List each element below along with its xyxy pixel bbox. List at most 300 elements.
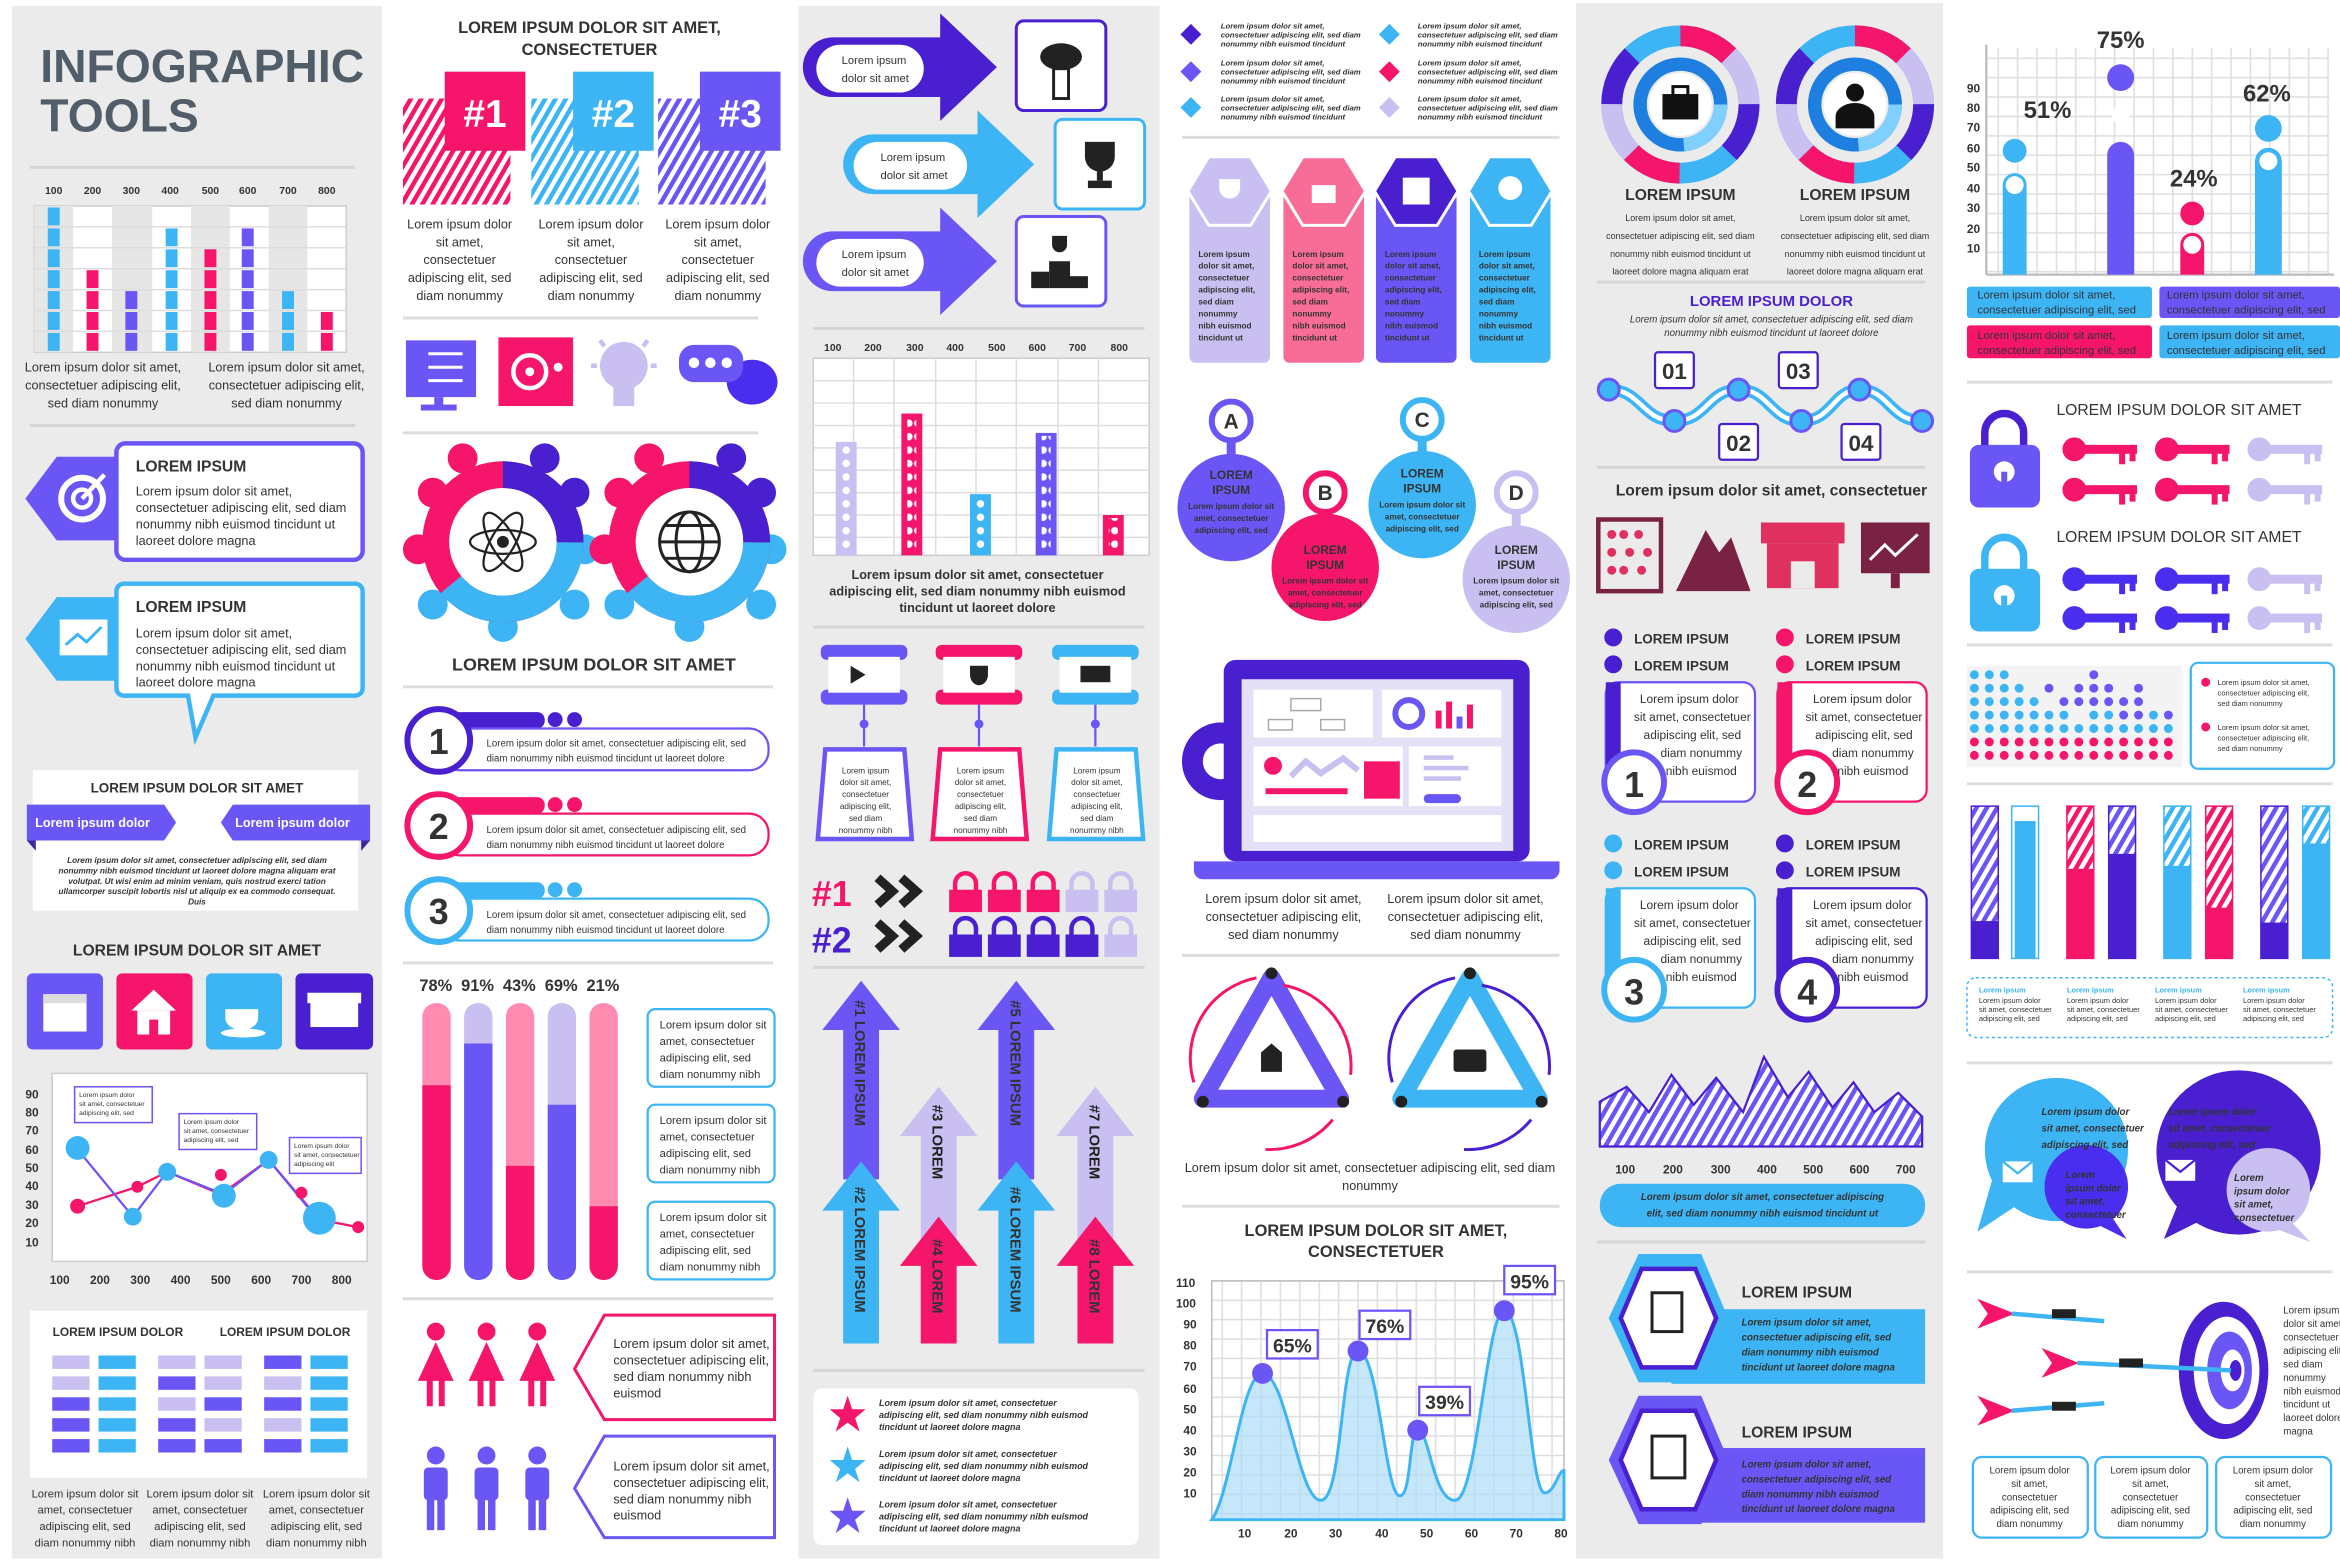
ranking blocks #1 #2 #3: consectetuer <box>555 253 628 267</box>
hex item: document: LOREM IPSUM <box>1742 1284 1852 1301</box>
balloons A B C D: LOREM <box>1210 468 1253 482</box>
dotted legend box: sit amet, consectetuer <box>2243 1005 2316 1014</box>
bar chart: squares: 500 <box>202 186 219 197</box>
callout: target: nonummy nibh euismod tincidunt ut <box>136 517 336 531</box>
area chart: 110 <box>1176 1276 1196 1290</box>
bar chart: people heads: 60 <box>1967 141 1981 155</box>
text block: table captions: diam nonummy nibh <box>35 1538 135 1550</box>
line chart: 20 <box>25 1216 39 1230</box>
dotted legend box: Lorem ipsum dolor <box>1979 996 2041 1005</box>
up arrows: #1 LOREM IPSUM <box>851 1000 868 1126</box>
legend box: dot matrix: Lorem ipsum dolor sit amet, <box>2218 723 2310 732</box>
area chart: 10 <box>1183 1486 1197 1500</box>
legend: diamonds: Lorem ipsum dolor sit amet, <box>1221 95 1325 104</box>
line chart: 700 <box>291 1273 312 1287</box>
callout: women: euismod <box>613 1386 661 1400</box>
area chart: 70 <box>1510 1527 1523 1541</box>
callout: men: sed diam nonummy nibh <box>613 1492 751 1506</box>
icons: men <box>424 1447 549 1530</box>
capsule bar chart: 69% <box>545 977 578 995</box>
text block: laptop captions: consectetuer adipiscing elit, <box>1388 910 1543 924</box>
numbered items 1 and 2: Lorem ipsum dolor <box>1813 692 1912 706</box>
icons row: checklist, safe, bulb, chat <box>406 337 778 411</box>
numbered items 3 and 4: diam nonummy <box>1832 952 1914 966</box>
line chart: 80 <box>25 1106 39 1120</box>
dot matrix chart <box>1967 666 2182 767</box>
bar chart: squares: 300 <box>123 186 140 197</box>
numbered items 3 and 4: nibh euismod <box>1666 970 1737 984</box>
hanging tags: Lorem ipsum <box>957 766 1004 775</box>
area chart: 30 <box>1329 1527 1343 1541</box>
legend: diamonds: consectetuer adipiscing elit, sed diam <box>1418 68 1558 77</box>
numbered item 1: Lorem ipsum dolor sit amet, consectetuer adipiscing elit, sed <box>487 738 746 749</box>
hanging tags: adipiscing elit, <box>955 802 1006 811</box>
hexagon tags: nibh euismod <box>1292 321 1346 330</box>
text boxes: darts: diam nonummy <box>2240 1519 2306 1530</box>
numbered item 1 <box>407 709 769 772</box>
wave timeline: 02 <box>1726 431 1751 456</box>
hexagon tags: tincidunt ut <box>1479 333 1524 342</box>
text block: laptop captions <box>1205 892 1544 942</box>
hanging tags: nonummy nibh <box>839 826 893 835</box>
banner panel: volutpat. Ut wisi enim ad minim veniam, quis nostrud exerci tation <box>68 877 326 886</box>
numbered items 3 and 4: LOREM IPSUM <box>1634 837 1729 852</box>
text boxes: darts: consectetuer <box>2123 1492 2179 1503</box>
hexagon tags: tincidunt ut <box>1292 333 1337 342</box>
locks and keys: LOREM IPSUM DOLOR SIT AMET <box>2056 529 2302 546</box>
capsule bar chart: 21% <box>586 977 620 995</box>
hexagon tags: consectetuer <box>1385 274 1437 283</box>
bar chart: people heads: 80 <box>1967 101 1981 115</box>
numbered items 1 and 2: LOREM IPSUM <box>1806 658 1900 673</box>
arrow 1 with cloud icon: Lorem ipsum <box>842 55 906 67</box>
area chart: 40 <box>1183 1424 1197 1438</box>
text block: donut captions <box>1606 187 1929 277</box>
text block: table captions: amet, consectetuer <box>152 1505 248 1517</box>
bar chart: squares: 100 <box>45 186 63 197</box>
ranking blocks #1 #2 #3: diam nonummy <box>548 289 635 303</box>
heading: wave timeline: LOREM IPSUM DOLOR <box>1690 293 1853 310</box>
darts and target: consectetuer <box>2283 1333 2340 1344</box>
legend: diamonds: nonummy nibh euismod tincidunt <box>1418 77 1543 86</box>
legend: stars: tincidunt ut laoreet dolore magna <box>879 1422 1021 1432</box>
balloons A B C D: Lorem ipsum dolor sit <box>1379 501 1465 510</box>
ranking blocks #1 #2 #3: Lorem ipsum dolor <box>539 217 644 231</box>
hex item: document: Lorem ipsum dolor sit amet, <box>1742 1318 1871 1329</box>
text block: table captions <box>32 1488 371 1550</box>
hex item: document: tincidunt ut laoreet dolore magna <box>1742 1362 1896 1373</box>
numbered items 1 and 2: sit amet, consectetuer <box>1634 710 1751 724</box>
legend: diamonds: consectetuer adipiscing elit, sed diam <box>1221 30 1361 39</box>
title: INFOGRAPHIC <box>40 40 364 92</box>
text boxes: capsule chart: diam nonummy nibh <box>660 1164 760 1176</box>
numbered items 1 and 2: Lorem ipsum dolor <box>1640 692 1739 706</box>
text block: laptop captions: consectetuer adipiscing elit, <box>1206 910 1361 924</box>
speech bubbles: ipsum dolor <box>2065 1183 2122 1194</box>
legend: stars: Lorem ipsum dolor sit amet, consectetuer <box>879 1500 1057 1510</box>
callout: target: LOREM IPSUM <box>136 459 246 476</box>
speech bubbles: sit amet, <box>2234 1200 2273 1211</box>
hanging tags: sed diam <box>964 814 997 823</box>
gear: globe <box>589 443 786 642</box>
text boxes: capsule chart: adipiscing elit, sed <box>660 1245 751 1257</box>
balloons A B C D: LOREM <box>1304 543 1347 557</box>
dotted legend box: Lorem ipsum <box>2155 986 2202 995</box>
balloons A B C D: IPSUM <box>1306 558 1344 572</box>
ranking blocks #1 #2 #3: consectetuer <box>682 253 755 267</box>
legend: stars: adipiscing elit, sed diam nonummy nibh euismod <box>879 1512 1089 1522</box>
dotted legend box <box>1967 978 2333 1038</box>
darts and target: Lorem ipsum <box>2283 1306 2339 1317</box>
dotted legend box: Lorem ipsum dolor <box>2243 996 2305 1005</box>
text boxes: darts: adipiscing elit, sed <box>2111 1506 2190 1517</box>
legend: stars <box>813 1388 1139 1545</box>
hanging tags: Lorem ipsum <box>1073 766 1121 775</box>
legend: diamonds: Lorem ipsum dolor sit amet, <box>1221 59 1325 68</box>
legend: diamonds <box>1180 21 1558 121</box>
banner panel: Lorem ipsum dolor <box>235 816 350 830</box>
area chart: 80 <box>1183 1339 1197 1353</box>
up arrows: #5 LOREM IPSUM <box>1006 1000 1023 1126</box>
gear: atom <box>403 443 600 642</box>
line chart: adipiscing elit, sed <box>79 1110 134 1117</box>
colored text boxes: consectetuer adipiscing elit, sed <box>1977 345 2136 357</box>
hanging tags: consectetuer <box>957 790 1004 799</box>
dotted legend box: sit amet, consectetuer <box>2067 1005 2140 1014</box>
text block: bar chart caption: tincidunt ut laoreet dolore <box>899 601 1056 615</box>
numbered items 1 and 2: LOREM IPSUM <box>1634 631 1729 646</box>
line chart: 50 <box>25 1161 39 1175</box>
text block: chart captions: sed diam nonummy <box>231 397 342 411</box>
banner panel <box>27 770 370 911</box>
ranking blocks #1 #2 #3: consectetuer <box>423 253 497 267</box>
cycle triangles <box>1190 967 1550 1150</box>
colored text boxes: Lorem ipsum dolor sit amet, <box>1977 330 2115 342</box>
text boxes: capsule chart: amet, consectetuer <box>660 1036 755 1048</box>
speech bubbles: Lorem ipsum dolor <box>2042 1107 2130 1118</box>
hexagon tags: nonummy <box>1479 309 1518 318</box>
callout: men <box>575 1436 775 1538</box>
balloons A B C D: adipiscing elit, sed <box>1386 524 1459 533</box>
hexagon tags: Lorem ipsum <box>1198 250 1250 259</box>
text block: laptop captions: sed diam nonummy <box>1228 928 1339 942</box>
text block: laptop captions: Lorem ipsum dolor sit amet, <box>1387 892 1544 906</box>
hex item: document: consectetuer adipiscing elit, sed <box>1742 1333 1892 1344</box>
darts and target: sed diam <box>2283 1359 2323 1370</box>
hexagon tags: sed diam <box>1479 298 1514 307</box>
banner panel: Lorem ipsum dolor <box>35 816 150 830</box>
callout: target: laoreet dolore magna <box>136 534 256 548</box>
bar chart: dotted columns: 500 <box>988 343 1006 354</box>
locks and keys: LOREM IPSUM DOLOR SIT AMET <box>2056 402 2302 419</box>
text block: donut captions: Lorem ipsum dolor sit amet, <box>1800 213 1910 223</box>
ranking locks: #1 <box>812 874 852 914</box>
line chart: sit amet, consectetuer <box>184 1128 250 1135</box>
numbered items 3 and 4: LOREM IPSUM <box>1634 864 1729 879</box>
legend: stars: adipiscing elit, sed diam nonummy nibh euismod <box>879 1461 1089 1471</box>
text block: table captions: adipiscing elit, sed <box>39 1521 131 1533</box>
numbered items 3 and 4: Lorem ipsum dolor <box>1640 898 1739 912</box>
legend: diamonds: Lorem ipsum dolor sit amet, <box>1221 21 1325 30</box>
numbered items 1 and 2: diam nonummy <box>1832 746 1914 760</box>
heading: icons: LOREM IPSUM DOLOR SIT AMET <box>73 942 321 959</box>
up arrows: #4 LOREM <box>929 1239 946 1314</box>
area chart: 90 <box>1183 1318 1197 1332</box>
heading: wave timeline: Lorem ipsum dolor sit amet, consectetuer adipiscing elit, sed diam <box>1630 314 1913 325</box>
bar chart: squares: 800 <box>318 186 336 197</box>
title <box>40 40 364 141</box>
area chart: 20 <box>1284 1527 1298 1541</box>
line chart: 90 <box>25 1088 39 1102</box>
ranking blocks #1 #2 #3: #2 <box>592 93 635 136</box>
hexagon tags: nonummy <box>1385 309 1424 318</box>
legend box: dot matrix: Lorem ipsum dolor sit amet, <box>2218 678 2310 687</box>
bar chart: squares: 200 <box>84 186 101 197</box>
text block: donut captions: laoreet dolore magna aliquam erat <box>1612 267 1749 277</box>
numbered item 2 <box>407 794 769 857</box>
balloons A B C D: LOREM <box>1401 467 1444 481</box>
legend: stars: tincidunt ut laoreet dolore magna <box>879 1524 1021 1534</box>
balloons A B C D: amet, consectetuer <box>1479 589 1554 598</box>
up arrows: #6 LOREM IPSUM <box>1006 1187 1023 1313</box>
bar chart: dotted columns: 400 <box>946 343 964 354</box>
ranking blocks #1 #2 #3: #1 <box>463 93 507 136</box>
bar chart: dotted columns <box>813 343 1149 555</box>
text block: chart captions: consectetuer adipiscing elit, <box>25 379 181 393</box>
hex item: book: consectetuer adipiscing elit, sed <box>1742 1474 1892 1485</box>
numbered items 1 and 2: nibh euismod <box>1666 764 1737 778</box>
numbered items 1 and 2: sit amet, consectetuer <box>1806 710 1922 724</box>
bar chart: people heads: 75% <box>2097 27 2145 54</box>
dotted legend box: adipiscing elit, sed <box>1979 1014 2040 1023</box>
text boxes: capsule chart: Lorem ipsum dolor sit <box>660 1115 767 1127</box>
text block: table captions: adipiscing elit, sed <box>154 1521 246 1533</box>
callout: monitor: consectetuer adipiscing elit, sed diam <box>136 643 346 657</box>
ranking blocks #1 #2 #3: sit amet, <box>694 235 742 249</box>
hex item: book: LOREM IPSUM <box>1742 1425 1852 1442</box>
capsule bar chart: 78% <box>419 977 453 995</box>
area chart: 39% <box>1425 1392 1464 1414</box>
mountain chart: Lorem ipsum dolor sit amet, consectetuer adipiscing <box>1641 1192 1884 1203</box>
legend: stars: adipiscing elit, sed diam nonummy nibh euismod <box>879 1410 1089 1420</box>
ranking blocks #1 #2 #3: sit amet, <box>436 235 484 249</box>
dotted legend box: Lorem ipsum dolor <box>2155 996 2217 1005</box>
numbered item 1: 1 <box>429 722 449 762</box>
bar chart: people heads: 90 <box>1967 82 1981 96</box>
banner panel: LOREM IPSUM DOLOR SIT AMET <box>91 781 304 796</box>
ranking blocks #1 #2 #3: adipiscing elit, sed <box>539 271 643 285</box>
text boxes: darts: Lorem ipsum dolor <box>1989 1465 2070 1476</box>
numbered items 3 and 4: LOREM IPSUM <box>1806 864 1900 879</box>
callout: monitor: laoreet dolore magna <box>136 676 256 690</box>
numbered items 1 and 2: 1 <box>1624 765 1644 805</box>
heading: numbered list: LOREM IPSUM DOLOR SIT AMET <box>452 654 736 674</box>
hexagon tags: adipiscing elit, <box>1385 286 1442 295</box>
bar chart: squares <box>34 186 346 352</box>
heading: column 2: CONSECTETUER <box>522 41 658 59</box>
mountain chart: 200 <box>1663 1162 1683 1176</box>
text block: table captions: Lorem ipsum dolor sit <box>147 1488 254 1500</box>
hexagon tags: tincidunt ut <box>1198 333 1243 342</box>
hex item: document: diam nonummy nibh euismod <box>1742 1347 1880 1358</box>
hex item: book: Lorem ipsum dolor sit amet, <box>1742 1459 1871 1470</box>
hex item: book: diam nonummy nibh euismod <box>1742 1489 1880 1500</box>
text block: chart captions: Lorem ipsum dolor sit amet, <box>208 361 365 375</box>
hexagon tags: adipiscing elit, <box>1198 286 1255 295</box>
line chart: 60 <box>25 1143 39 1157</box>
legend box: dot matrix <box>2191 663 2334 769</box>
up arrows: #7 LOREM <box>1085 1105 1102 1179</box>
numbered items 3 and 4: LOREM IPSUM <box>1806 837 1900 852</box>
ranking locks: #2 <box>812 920 852 960</box>
text block: bar chart caption: Lorem ipsum dolor sit amet, consectetuer <box>851 568 1104 582</box>
donut: briefcase <box>1612 36 1749 173</box>
numbered items 1 and 2: adipiscing elit, sed <box>1815 728 1913 742</box>
laptop with gear <box>1182 660 1560 879</box>
hexagon tags: dolor sit amet, <box>1479 262 1535 271</box>
hexagon tags: nonummy <box>1198 309 1238 318</box>
darts and target: magna <box>2283 1427 2314 1438</box>
area chart: 20 <box>1183 1465 1197 1479</box>
text boxes: capsule chart: amet, consectetuer <box>660 1132 755 1144</box>
area chart: 10 <box>1238 1527 1252 1541</box>
text boxes: darts: consectetuer <box>2002 1492 2058 1503</box>
balloons A B C D: adipiscing elit, sed <box>1195 526 1268 535</box>
balloons A B C D: adipiscing elit, sed <box>1480 601 1553 610</box>
hex item: book <box>1609 1396 1925 1524</box>
text boxes: darts: diam nonummy <box>1996 1519 2063 1530</box>
text boxes: darts: adipiscing elit, sed <box>1990 1506 2069 1517</box>
colored text boxes: Lorem ipsum dolor sit amet, <box>1977 290 2115 302</box>
ranking blocks #1 #2 #3: #3 <box>719 93 762 136</box>
dotted legend box: adipiscing elit, sed <box>2243 1014 2304 1023</box>
balloons A B C D: adipiscing elit, sed <box>1289 601 1362 610</box>
text block: table captions: diam nonummy nibh <box>150 1538 250 1550</box>
text block: chart captions <box>25 361 365 411</box>
wave timeline <box>1598 352 1933 460</box>
hexagon tags: dolor sit amet, <box>1198 262 1254 271</box>
panel: column 5 background <box>1576 3 1943 1559</box>
speech bubbles: consectetuer <box>2065 1210 2127 1221</box>
area chart: 70 <box>1183 1359 1197 1373</box>
text block: table captions: Lorem ipsum dolor sit <box>32 1488 139 1500</box>
hexagon tags: adipiscing elit, <box>1479 286 1536 295</box>
capsule bar chart: 91% <box>461 977 494 995</box>
line chart: Lorem ipsum dolor <box>79 1092 135 1099</box>
numbered items 3 and 4: sit amet, consectetuer <box>1634 916 1751 930</box>
text block: table captions: diam nonummy nibh <box>266 1538 367 1550</box>
numbered items 3 and 4: 4 <box>1797 973 1817 1013</box>
hexagon tags: consectetuer <box>1479 274 1531 283</box>
ranking blocks #1 #2 #3: sit amet, <box>567 235 615 249</box>
balloons A B C D: amet, consectetuer <box>1288 589 1363 598</box>
arrow 2 with trophy icon: Lorem ipsum <box>880 152 945 164</box>
text boxes: capsule chart: adipiscing elit, sed <box>660 1148 751 1160</box>
text block: donut captions: LOREM IPSUM <box>1625 187 1736 204</box>
area chart: 30 <box>1183 1445 1197 1459</box>
text boxes: darts: sit amet, <box>2132 1479 2169 1490</box>
numbered items 3 and 4: 3 <box>1624 973 1644 1013</box>
line chart: 70 <box>25 1124 39 1138</box>
dotted legend box: sit amet, consectetuer <box>2155 1005 2228 1014</box>
bar chart: people heads: 30 <box>1967 201 1981 215</box>
balloons A B C D: IPSUM <box>1212 483 1250 497</box>
panel: column 1 background <box>12 6 382 1559</box>
legend: diamonds: Lorem ipsum dolor sit amet, <box>1418 21 1521 30</box>
ranking blocks #1 #2 #3: adipiscing elit, sed <box>666 271 770 285</box>
text boxes: capsule chart: Lorem ipsum dolor sit <box>660 1212 767 1224</box>
text block: donut captions: laoreet dolore magna aliquam erat <box>1787 267 1924 277</box>
numbered items 3 and 4: nibh euismod <box>1837 970 1908 984</box>
text block: table captions: amet, consectetuer <box>37 1505 133 1517</box>
text boxes: darts: diam nonummy <box>2117 1519 2184 1530</box>
table panel: LOREM IPSUM DOLOR <box>220 1325 351 1339</box>
text boxes: darts: Lorem ipsum dolor <box>2110 1465 2191 1476</box>
numbered items 1 and 2: 2 <box>1797 765 1817 805</box>
line chart: adipiscing elit <box>294 1161 334 1168</box>
legend box: dot matrix: consectetuer adipiscing elit, <box>2218 689 2309 698</box>
heading: column 2: LOREM IPSUM DOLOR SIT AMET, <box>458 19 721 37</box>
speech bubbles: adipiscing elit, sed <box>2042 1140 2129 1151</box>
heading: wave timeline <box>1630 293 1913 339</box>
legend: diamonds: consectetuer adipiscing elit, sed diam <box>1418 30 1558 39</box>
text boxes: capsule chart: diam nonummy nibh <box>660 1069 760 1081</box>
numbered items 3 and 4: adipiscing elit, sed <box>1644 934 1741 948</box>
bar chart: people heads: 51% <box>2024 97 2071 124</box>
area chart: 60 <box>1465 1527 1478 1541</box>
callout: men: consectetuer adipiscing elit, <box>613 1476 769 1490</box>
balloons A B C D: amet, consectetuer <box>1194 514 1269 523</box>
icons row: squares <box>27 973 373 1049</box>
numbered items 3 and 4 <box>1604 834 1927 1020</box>
hanging tags: consectetuer <box>1073 790 1121 799</box>
hexagon tags: sed diam <box>1292 298 1328 307</box>
hexagon tags: Lorem ipsum <box>1292 250 1344 259</box>
text boxes: darts: sit amet, <box>2255 1479 2291 1490</box>
icons row: abacus, mountain, shop, chart <box>1598 520 1930 591</box>
hanging tags: sed diam <box>849 814 882 823</box>
darts and target: nibh euismod <box>2283 1386 2340 1397</box>
numbered items 3 and 4: adipiscing elit, sed <box>1815 934 1913 948</box>
dotted legend box: Lorem ipsum <box>2067 986 2114 995</box>
capsule bar chart: 43% <box>503 977 536 995</box>
numbered item 3: diam nonummy nibh euismod tincidunt ut laoreet dolore <box>487 925 724 936</box>
bar chart: dotted columns: 300 <box>906 343 924 354</box>
area chart: 50 <box>1420 1527 1434 1541</box>
numbered items 3 and 4: Lorem ipsum dolor <box>1813 898 1912 912</box>
bar chart: dotted columns: 600 <box>1028 343 1046 354</box>
bar chart: squares: 400 <box>161 186 179 197</box>
callout: women: Lorem ipsum dolor sit amet, <box>613 1337 770 1351</box>
colored text boxes: consectetuer adipiscing elit, sed <box>2167 304 2325 316</box>
ranking blocks #1 #2 #3: diam nonummy <box>416 289 504 303</box>
legend: diamonds: consectetuer adipiscing elit, sed diam <box>1418 103 1558 112</box>
area chart: 65% <box>1273 1335 1312 1357</box>
wave timeline: 04 <box>1849 431 1874 456</box>
ranking blocks #1 #2 #3: diam nonummy <box>675 289 762 303</box>
arrow 2 with trophy icon: dolor sit amet <box>880 170 949 182</box>
bar chart: dotted columns: 100 <box>824 343 842 354</box>
text block: bar chart caption <box>829 568 1126 615</box>
numbered items 1 and 2 <box>1604 628 1927 812</box>
text block: triangles caption: nonummy <box>1342 1179 1398 1193</box>
line chart: Lorem ipsum dolor <box>294 1143 350 1150</box>
line chart: Lorem ipsum dolor <box>184 1119 240 1126</box>
text block: donut captions: consectetuer adipiscing elit, sed diam <box>1606 231 1755 241</box>
donut: person <box>1786 36 1924 173</box>
area chart: 100 <box>1176 1297 1196 1311</box>
balloons A B C D: amet, consectetuer <box>1385 513 1460 522</box>
